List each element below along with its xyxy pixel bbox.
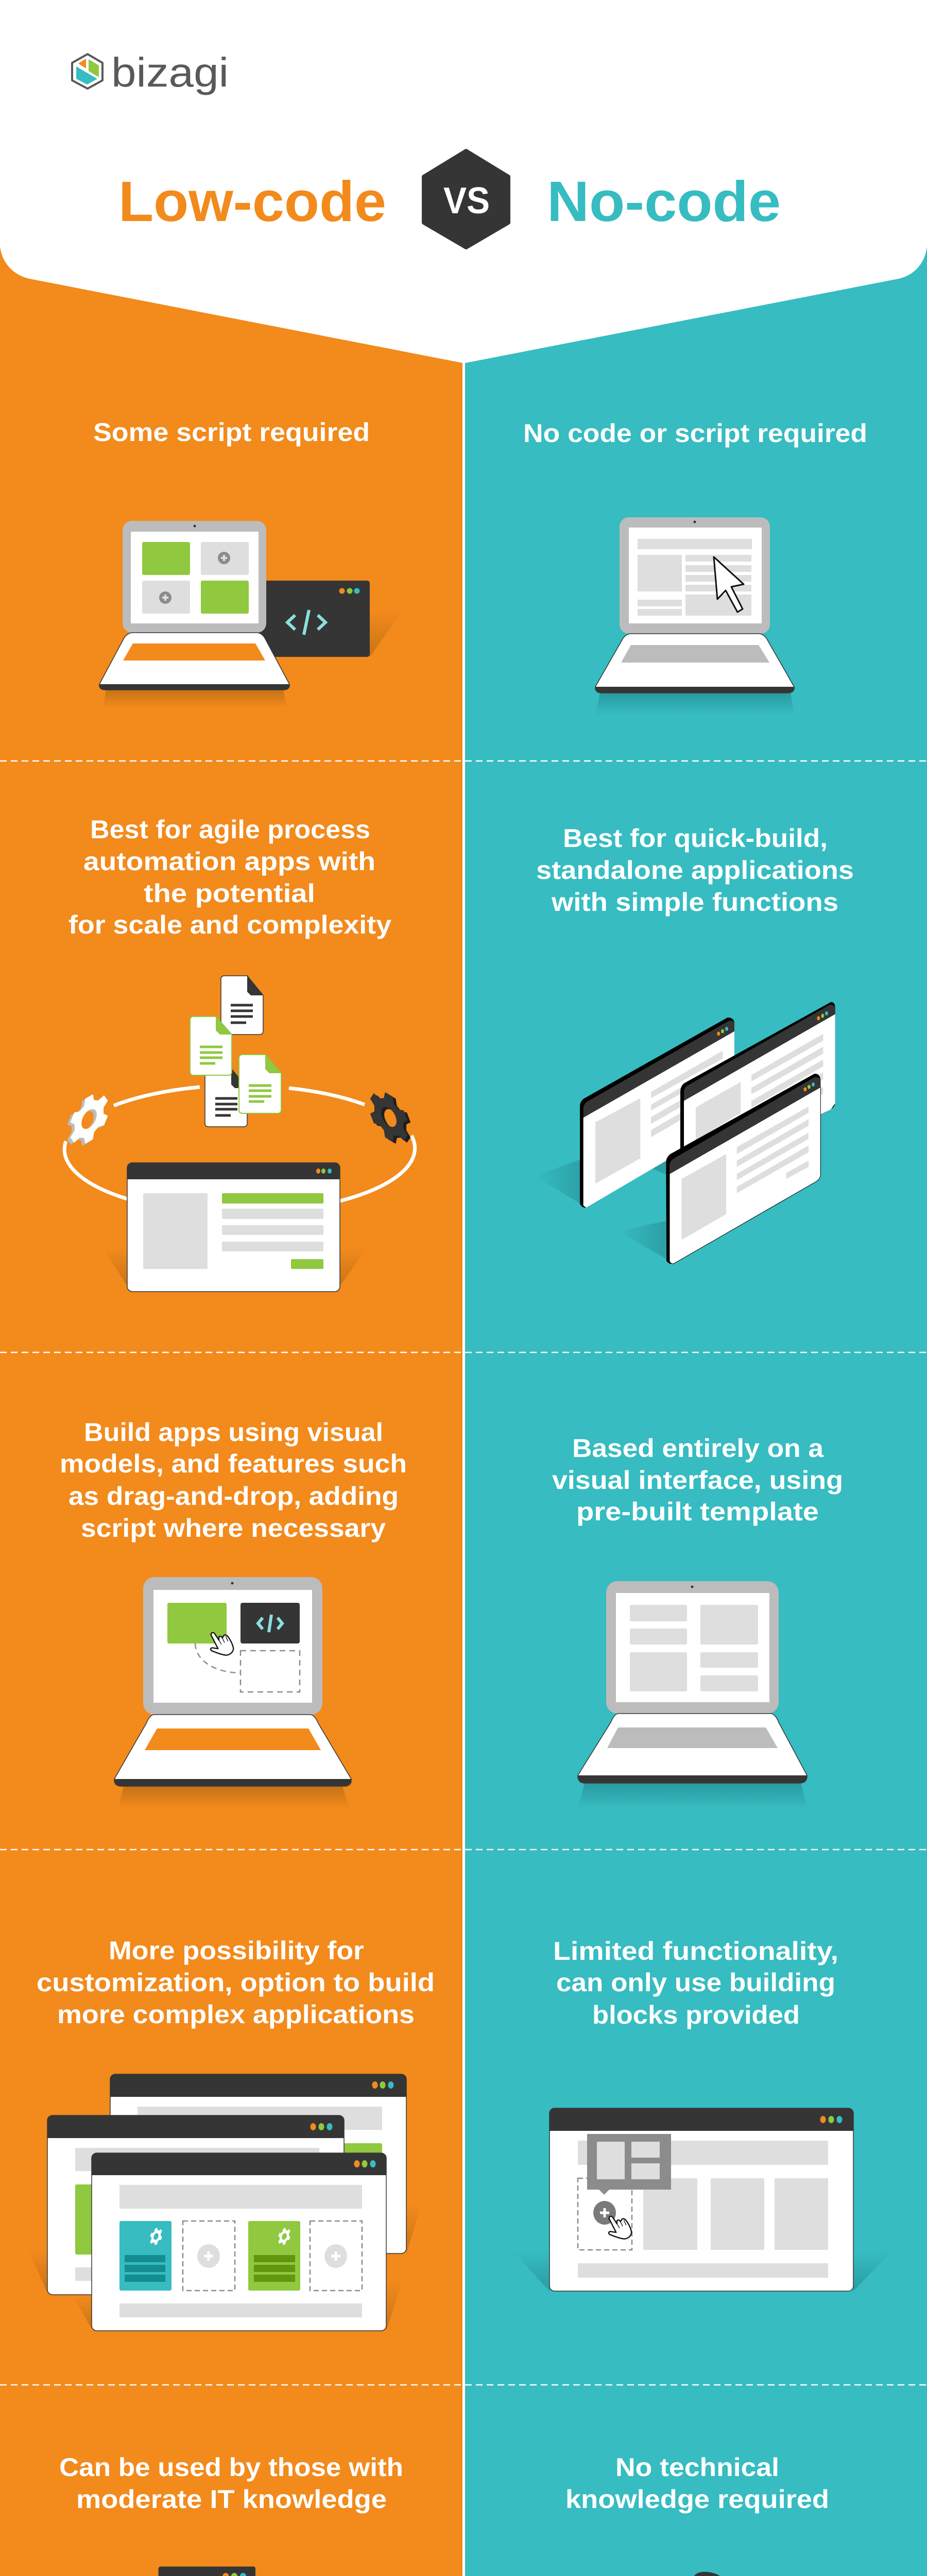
card green (248, 2221, 300, 2291)
card placeholder one (183, 2221, 235, 2291)
text block: best for agile process automation (68, 815, 391, 939)
laptop base (114, 1715, 351, 1786)
text block: based entirely on a visual interface: visual interface, using (552, 1466, 843, 1495)
illustration: stacked application windows (28, 2074, 421, 2331)
text block: build apps using visual models (60, 1418, 407, 1543)
text block: build apps using visual models: script where necessary (81, 1514, 386, 1543)
logo: bizagi (72, 49, 229, 95)
text block: build apps using visual models: as drag-and-drop, adding (68, 1482, 399, 1511)
illustration: laptop with cursor (595, 517, 794, 715)
illustration: person with tablet (662, 2572, 761, 2576)
heading: No code or script required: No code or script required (523, 419, 867, 448)
text block: more possibility for customization: more complex applications (57, 2000, 415, 2029)
title: Low-code: Low-code (118, 170, 386, 233)
icon: green document left (190, 1016, 232, 1075)
icon: drag hand (211, 1633, 233, 1655)
icon: dark gear (370, 1083, 410, 1153)
text block: based entirely on a visual interface: Based entirely on a (572, 1434, 824, 1463)
text block: limited functionality (553, 1937, 838, 2029)
text block: build apps using visual models: Build apps using visual (84, 1418, 383, 1447)
card teal (119, 2221, 171, 2291)
background: low-code orange column (0, 0, 464, 2576)
window front (92, 2153, 386, 2331)
illustration: person with laptop on cube (144, 2567, 359, 2576)
isometric window front (666, 1074, 820, 1264)
text block: limited functionality: can only use building (556, 1968, 835, 1997)
text block: no technical knowledge (565, 2453, 829, 2514)
icon: green document right (239, 1055, 281, 1113)
window back (110, 2074, 406, 2253)
title: No-code: No-code (547, 170, 781, 233)
icon: cursor arrow (714, 557, 744, 612)
text block: best for quick-build (536, 824, 854, 917)
text block: limited functionality: Limited functionality, (553, 1937, 838, 1965)
laptop screen (620, 517, 770, 634)
text block: no technical knowledge: knowledge required (565, 2485, 829, 2514)
text block: moderate IT knowledge (59, 2453, 403, 2514)
text block: moderate IT knowledge: Can be used by those with (59, 2453, 403, 2482)
text block: best for quick-build: with simple functions (551, 888, 838, 917)
icon: bizagi hexagon (72, 54, 102, 89)
laptop screen (143, 1577, 322, 1715)
illustration: laptop with code window (99, 521, 402, 707)
icon: document top (221, 976, 263, 1035)
text block: limited functionality: blocks provided (592, 2001, 800, 2029)
heading: Some script required: Some script required (93, 418, 370, 447)
illustration: three isometric windows (535, 1002, 835, 1264)
badge: VS hexagon (424, 151, 508, 247)
icon: white gear (67, 1086, 108, 1155)
text block: best for agile process automation: for scale and complexity (68, 910, 391, 939)
text block: best for agile process automation: the potential (144, 879, 315, 908)
illustration: laptop with template (578, 1581, 808, 1808)
text block: no technical knowledge: No technical (615, 2453, 779, 2482)
background: no-code teal column (464, 0, 927, 2576)
laptop screen (123, 521, 266, 633)
illustration: laptop with drag and drop (114, 1577, 351, 1808)
center divider (462, 309, 465, 2576)
text block: based entirely on a visual interface: pre-built template (576, 1497, 819, 1526)
laptop base (99, 633, 289, 690)
icon: document bottom (205, 1069, 247, 1127)
window middle (47, 2115, 344, 2295)
card placeholder two (310, 2221, 362, 2291)
text block: more possibility for customization: More possibility for (109, 1936, 364, 1965)
text block: best for quick-build: standalone applications (536, 856, 854, 885)
text block: more possibility for customization (37, 1936, 435, 2029)
isometric window back left (580, 1018, 734, 1208)
text block: based entirely on a visual interface (552, 1434, 843, 1526)
header panel (0, 0, 927, 363)
text block: best for agile process automation: Best for agile process (90, 815, 370, 844)
laptop base (595, 634, 794, 693)
text block: best for agile process automation: automation apps with (83, 847, 375, 876)
popup: block picker (587, 2134, 671, 2195)
icon: code window (159, 2567, 255, 2576)
badge: VS hexagon: VS (443, 180, 490, 222)
text block: more possibility for customization: customization, option to build (37, 1968, 435, 1997)
logo wordmark: bizagi (111, 49, 229, 95)
text block: moderate IT knowledge: moderate IT knowledge (76, 2485, 387, 2514)
laptop screen (606, 1581, 779, 1714)
illustration: process cycle with documents, gears and window (64, 976, 415, 1292)
illustration: window with building blocks popup (513, 2108, 891, 2291)
icon: add button with hand (593, 2201, 631, 2239)
isometric window back right (680, 1002, 835, 1181)
icon: code window (258, 581, 370, 657)
laptop base (578, 1714, 807, 1783)
text block: best for quick-build: Best for quick-build, (563, 824, 828, 853)
text block: build apps using visual models: models, and features such (60, 1449, 407, 1478)
window with content (127, 1163, 340, 1292)
cycle ring (64, 1087, 415, 1201)
